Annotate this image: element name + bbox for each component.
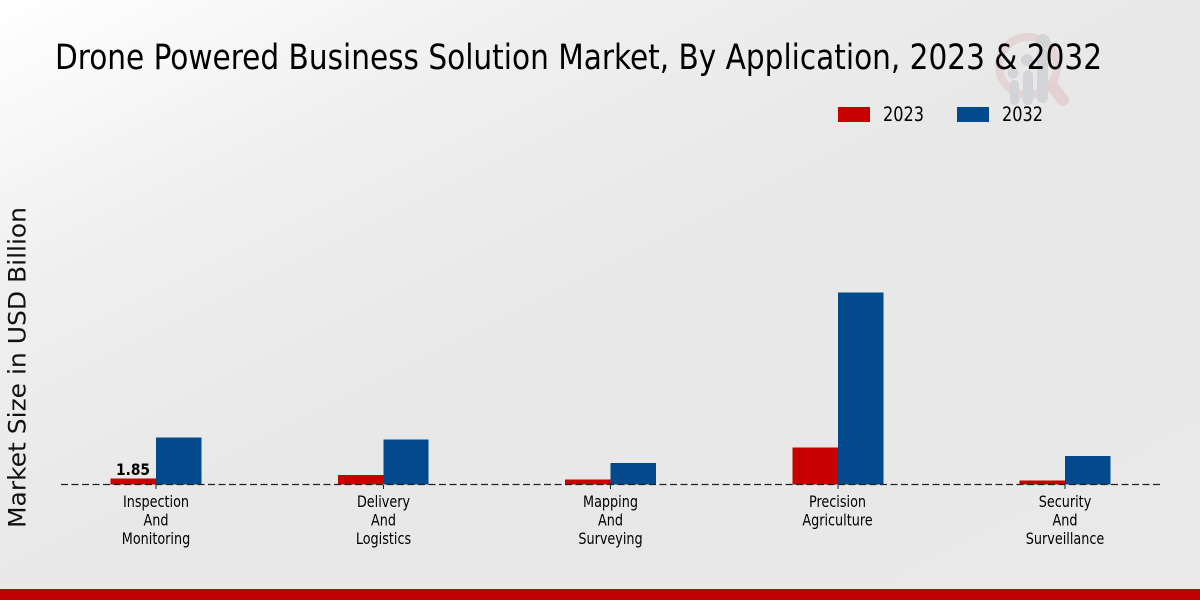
- category: Inspection And Monitoring: And: [144, 511, 168, 530]
- category: Precision Agriculture: Precision: [809, 492, 866, 511]
- category: Delivery And Logistics: Delivery: [357, 492, 410, 511]
- category: Security And Surveillance: Security: [1039, 492, 1091, 511]
- value label: 1.85: 1.85: [116, 460, 150, 479]
- legend: [838, 103, 1043, 126]
- group: Delivery And Logistics: [338, 440, 428, 484]
- bar chart: [61, 292, 1160, 489]
- category: Mapping And Surveying: And: [598, 511, 623, 530]
- group: Security And Surveillance: [1020, 456, 1110, 484]
- category: Delivery And Logistics: Logistics: [356, 529, 411, 548]
- y axis label: Market Size in USD Billion: [4, 207, 32, 528]
- category: Security And Surveillance: And: [1053, 511, 1077, 530]
- legend item: 2023: 2023: [883, 103, 924, 126]
- category: Inspection And Monitoring: Inspection: [123, 492, 189, 511]
- icon: watermark logo: [999, 34, 1063, 105]
- footer band: [0, 589, 1200, 600]
- category: Mapping And Surveying: Surveying: [578, 529, 643, 548]
- group: Precision Agriculture: [792, 292, 884, 484]
- legend item: 2023: [838, 103, 924, 126]
- category: Mapping And Surveying: Mapping: [583, 492, 638, 511]
- legend item: 2032: 2032: [1002, 103, 1043, 126]
- category: Security And Surveillance: Surveillance: [1026, 529, 1104, 548]
- category: Precision Agriculture: Agriculture: [802, 511, 873, 530]
- category: Delivery And Logistics: And: [371, 511, 396, 530]
- baseline: [61, 484, 1160, 486]
- category: Inspection And Monitoring: Monitoring: [122, 529, 190, 548]
- legend item: 2032: [957, 103, 1043, 126]
- group: Inspection And Monitoring: [110, 438, 202, 484]
- title: Drone Powered Business Solution Market, By Application, 2023 & 2032: [55, 38, 1102, 78]
- x axis labels: [122, 492, 1104, 548]
- group: Mapping And Surveying: [565, 463, 656, 484]
